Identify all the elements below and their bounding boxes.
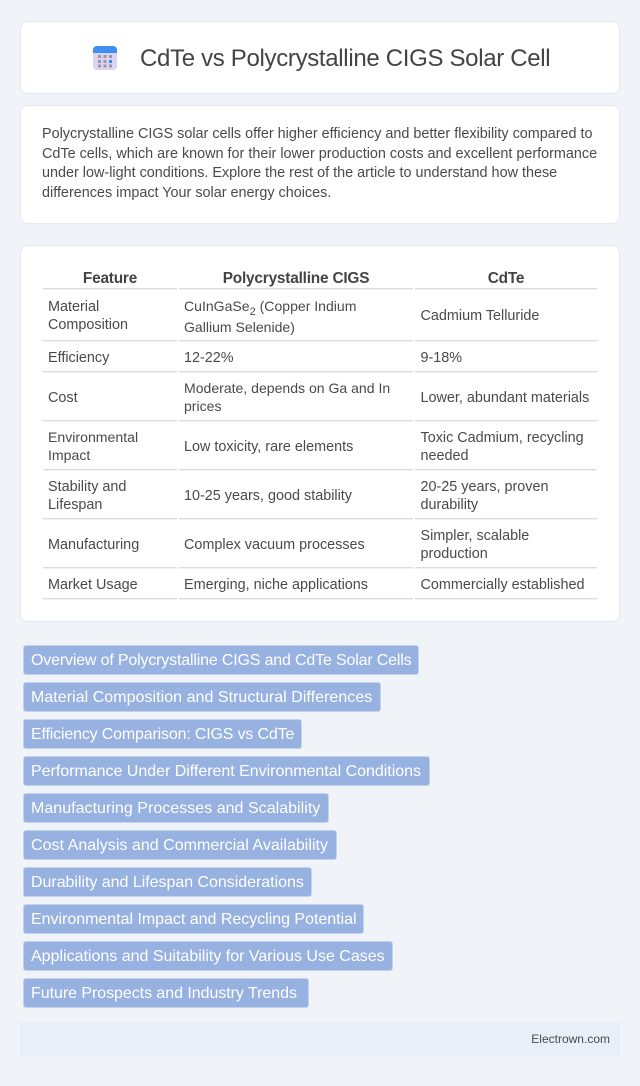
topic pill 5: Manufacturing Processes and Scalability (31, 800, 320, 817)
table: column headings: Polycrystalline CIGS (223, 270, 369, 287)
topic pill 9 (23, 941, 393, 971)
topic pill 7: Durability and Lifespan Considerations (31, 874, 304, 891)
topic pill 8 (23, 904, 364, 934)
topic pill 2: Material Composition and Structural Differences (31, 689, 372, 706)
row: stability and lifespan: Lifespan (48, 497, 102, 513)
row: environmental impact: needed (420, 448, 469, 464)
topic pill 3: Efficiency Comparison: CIGS vs CdTe (31, 726, 294, 743)
topic pill 1 (23, 645, 419, 675)
topic pill 7 (23, 867, 312, 897)
title: CdTe vs Polycrystalline CIGS Solar Cell (140, 45, 550, 72)
row: efficiency: 9-18% (420, 350, 462, 366)
intro text panel (20, 105, 620, 224)
row: efficiency (48, 350, 462, 366)
topic pill 10: Future Prospects and Industry Trends (31, 985, 297, 1002)
intro paragraph: Polycrystalline CIGS solar cells offer higher efficiency and better flexibility compared to (42, 126, 593, 142)
row: environmental impact: Environmental (48, 429, 138, 445)
row: manufacturing: Complex vacuum processes (184, 537, 365, 553)
intro paragraph (42, 126, 597, 201)
intro paragraph: under low-light conditions. Explore the rest of the article to understand how these (42, 165, 557, 181)
topic pill 10 (23, 978, 309, 1008)
topic pill 6 (23, 830, 337, 860)
row: material composition: Gallium Selenide) (184, 319, 295, 335)
comparison table panel (20, 245, 620, 622)
header card (20, 21, 620, 94)
row: efficiency: Efficiency (48, 350, 109, 366)
intro paragraph: differences impact Your solar energy choices. (42, 185, 331, 201)
row: material composition: Cadmium Telluride (420, 308, 539, 324)
row: environmental impact (48, 429, 584, 464)
row: environmental impact: Impact (48, 447, 90, 463)
row: stability and lifespan: Stability and (48, 479, 126, 495)
table: column headings: CdTe (488, 270, 524, 287)
row: cost: Cost (48, 390, 78, 406)
topic pill 1: Overview of Polycrystalline CIGS and CdTe Solar Cells (31, 652, 411, 669)
row: market usage (48, 577, 584, 593)
row: environmental impact: Toxic Cadmium, recycling (420, 430, 584, 446)
row: manufacturing: production (420, 546, 488, 562)
footer credit: Electrown.com (531, 1032, 610, 1046)
topic pill 2 (23, 682, 381, 712)
row: material composition: Material (48, 299, 99, 315)
row: stability and lifespan (48, 479, 548, 513)
row: material composition: CuInGaSe2 (Copper Indium (184, 298, 356, 318)
topic pill 3 (23, 719, 302, 749)
row: stability and lifespan: 10-25 years, good stability (184, 488, 352, 504)
row: material composition: Composition (48, 317, 128, 333)
row: market usage: Commercially established (420, 577, 584, 593)
row: efficiency: 12-22% (184, 350, 234, 366)
row: stability and lifespan: durability (420, 497, 478, 513)
row: cost: prices (184, 398, 221, 414)
row: environmental impact: Low toxicity, rare elements (184, 439, 353, 455)
row: market usage: Market Usage (48, 577, 138, 593)
topic pill 4: Performance Under Different Environmental Conditions (31, 763, 421, 780)
footer bar (20, 1022, 620, 1056)
row: manufacturing (48, 528, 529, 562)
row: cost: Moderate, depends on Ga and In (184, 380, 390, 396)
row: manufacturing: Simpler, scalable (420, 528, 529, 544)
row: stability and lifespan: 20-25 years, proven (420, 479, 548, 495)
icon: calendar grid (93, 46, 117, 70)
topic pill 6: Cost Analysis and Commercial Availability (31, 837, 328, 854)
topic pill 8: Environmental Impact and Recycling Potential (31, 911, 357, 928)
row: manufacturing: Manufacturing (48, 537, 139, 553)
topic pill 4 (23, 756, 430, 786)
row: cost (48, 380, 589, 414)
topic list (23, 645, 430, 1008)
table: column headings: Feature (83, 270, 137, 287)
topic pill 5 (23, 793, 329, 823)
topic pill 9: Applications and Suitability for Various Use Cases (31, 948, 385, 965)
row: market usage: Emerging, niche applications (184, 577, 368, 593)
row: material composition (48, 298, 539, 335)
table: column headings (83, 270, 524, 287)
intro paragraph: CdTe cells, which are known for their lower production costs and excellent performance (42, 146, 597, 162)
row: cost: Lower, abundant materials (420, 390, 589, 406)
